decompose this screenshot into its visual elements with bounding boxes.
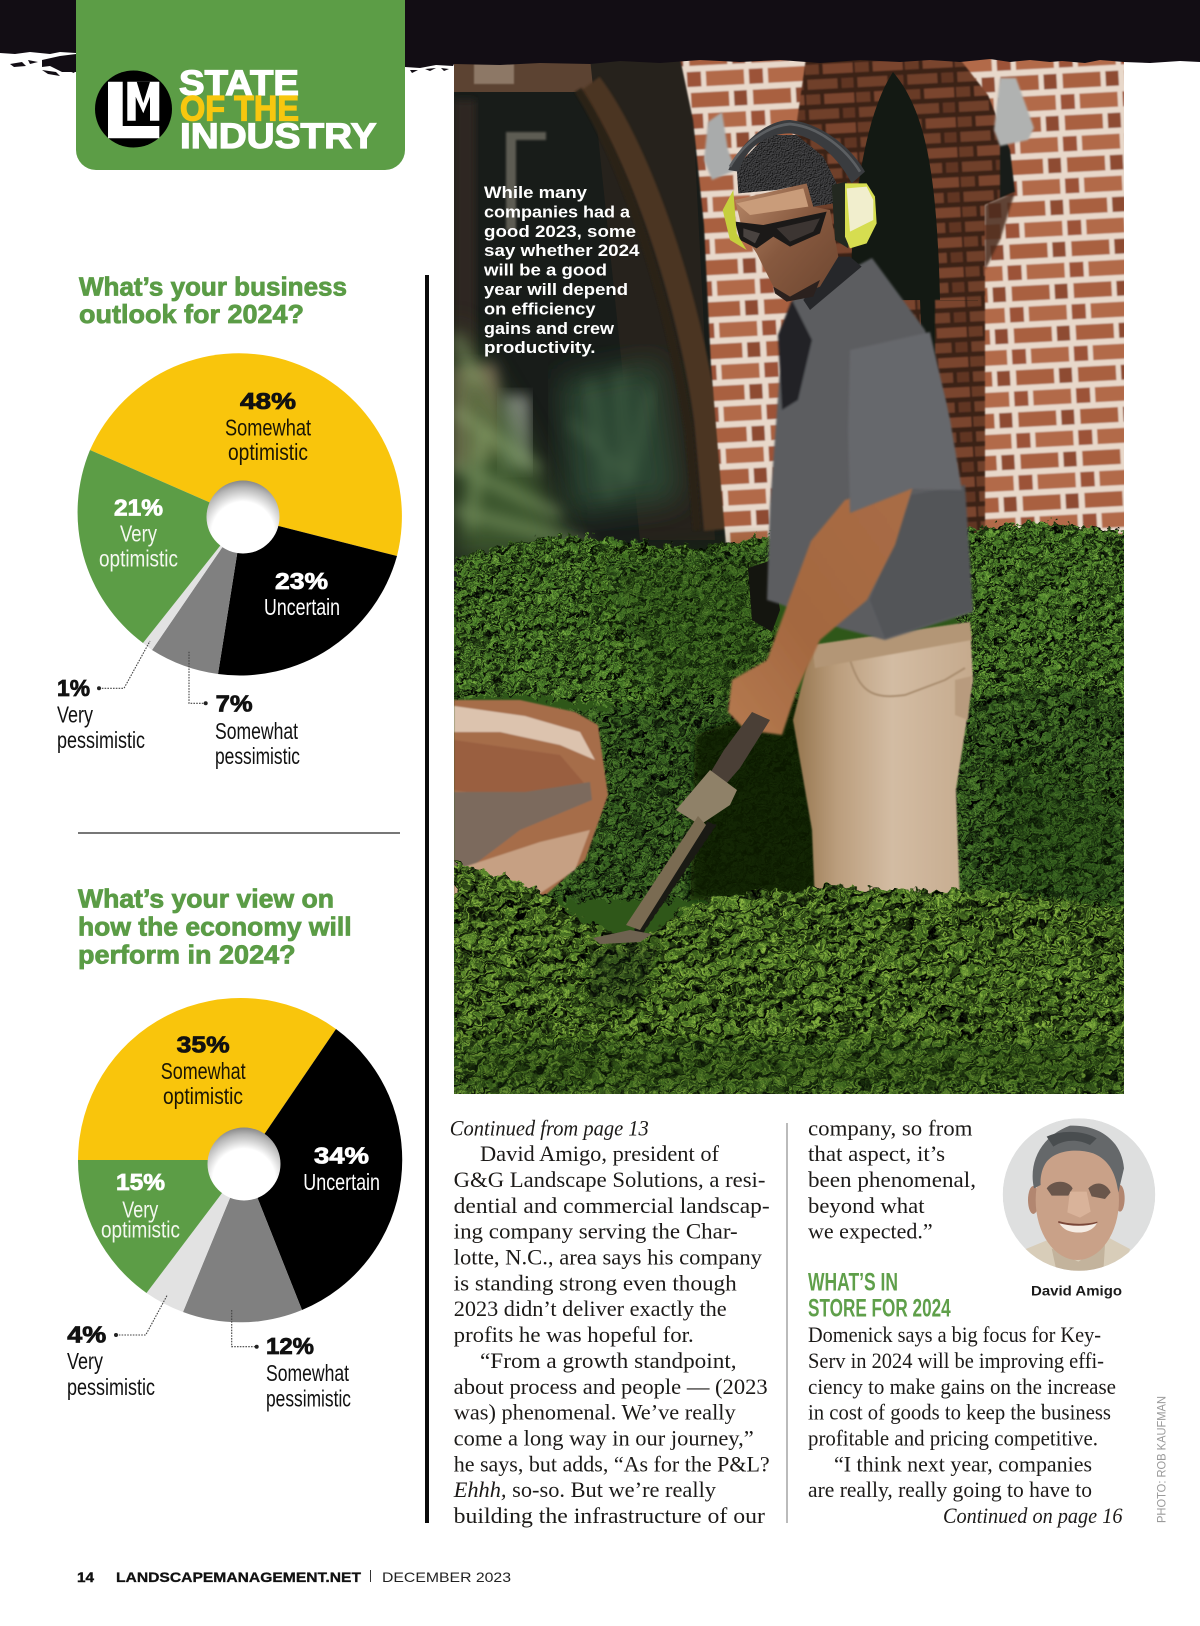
arched opening <box>852 72 978 355</box>
caption on photo: say whether 2024 <box>484 241 640 260</box>
label: 1% very pessimistic: 1% <box>57 675 90 701</box>
article column 2: company, so from <box>808 1116 973 1140</box>
man: head with ear protection <box>723 120 877 310</box>
article column 1: come a long way in our journey,” <box>454 1426 754 1450</box>
caption on photo: on efficiency <box>484 299 596 318</box>
article column 1: dential and commercial landscap- <box>454 1193 770 1218</box>
mid hedges <box>540 689 1130 925</box>
article column 2: “I think next year, companies <box>834 1451 1092 1476</box>
title text <box>179 64 376 156</box>
logo: LM roundel <box>95 70 172 148</box>
label: 48% somewhat optimistic: Somewhat <box>225 415 311 441</box>
label: 4% very pessimistic: pessimistic <box>67 1374 155 1400</box>
footer: LANDSCAPEMANAGEMENT.NET <box>116 1569 361 1585</box>
man: sleeve <box>848 332 962 513</box>
lamp left <box>704 112 736 180</box>
photo credit: PHOTO: ROB KAUFMAN <box>1156 1396 1168 1523</box>
hedge trimmer <box>593 712 770 944</box>
article column 1: Ehhh, so-so. But we’re really <box>453 1477 717 1502</box>
article column 2: Serv in 2024 will be improving effi- <box>808 1348 1104 1373</box>
photo: landscaper trimming hedge in front of brick house <box>454 58 1130 1100</box>
label: 1% very pessimistic: pessimistic <box>57 727 145 753</box>
pie chart: business outlook <box>57 353 402 769</box>
article column 1: building the infrastructure of our <box>454 1503 765 1528</box>
footer <box>77 1569 511 1585</box>
article column 2 <box>808 1116 1123 1528</box>
label: 15% very optimistic: 15% <box>116 1169 165 1195</box>
article column 1: “From a growth standpoint, <box>480 1348 737 1373</box>
label: 35% somewhat optimistic <box>161 1032 246 1109</box>
foreground hedge <box>454 862 1130 1100</box>
label: 35% somewhat optimistic: Somewhat <box>161 1058 246 1084</box>
man: trimmer harness <box>748 560 780 632</box>
caption on photo: companies had a <box>484 202 631 221</box>
caption on photo: gains and crew <box>484 319 615 338</box>
brick: right pillar <box>959 58 1130 550</box>
caption on photo: While many <box>484 183 588 202</box>
label: 7% somewhat pessimistic: 7% <box>216 691 253 717</box>
label: 21% very optimistic: optimistic <box>99 546 178 572</box>
article column 1: David Amigo, president of <box>480 1141 720 1166</box>
article column 1: profits he was hopeful for. <box>454 1322 694 1347</box>
caption on photo: good 2023, some <box>484 222 636 241</box>
label: 35% somewhat optimistic: 35% <box>177 1032 230 1058</box>
label: 48% somewhat optimistic <box>225 388 311 465</box>
label: 23% uncertain <box>264 568 340 620</box>
upper hedges <box>454 522 1130 740</box>
torn black top band <box>0 0 1200 76</box>
label: 35% somewhat optimistic: optimistic <box>163 1083 243 1109</box>
subhead: what's in store: STORE FOR 2024 <box>808 1294 951 1322</box>
article column 1 <box>450 1116 770 1528</box>
title text: STATE <box>179 64 299 103</box>
article column 2: in cost of goods to keep the business <box>808 1400 1111 1425</box>
article column 1: is standing strong even though <box>454 1270 737 1295</box>
brick: shadowed arch <box>780 58 1000 540</box>
caption on photo: will be a good <box>483 261 607 280</box>
article column 2: Continued on page 16 <box>943 1503 1123 1528</box>
label: 34% uncertain: Uncertain <box>303 1169 380 1195</box>
caption on photo: year will depend <box>484 280 628 299</box>
label: 21% very optimistic: Very <box>120 521 157 547</box>
article column 1: lotte, N.C., area says his company <box>454 1244 763 1270</box>
footer: DECEMBER 2023 <box>382 1569 511 1585</box>
caption on photo: productivity. <box>484 338 596 357</box>
label: 34% uncertain: 34% <box>314 1142 369 1168</box>
label: 21% very optimistic: 21% <box>114 495 163 521</box>
pie chart: economy view <box>67 998 402 1412</box>
article column 2: ciency to make gains on the increase <box>808 1374 1116 1399</box>
footer: 14 <box>77 1569 94 1585</box>
caption on photo <box>483 183 640 357</box>
heading: business outlook question <box>79 272 347 329</box>
label: 12% somewhat pessimistic <box>232 1310 351 1412</box>
label: 15% very optimistic: Very <box>122 1196 159 1222</box>
label: 12% somewhat pessimistic: Somewhat <box>266 1360 349 1386</box>
window interior plants and left fronds <box>454 320 680 560</box>
header tab: state of the industry <box>76 0 405 170</box>
article column 2: Domenick says a big focus for Key- <box>808 1322 1101 1347</box>
subhead: what's in store <box>808 1268 951 1322</box>
article column 2: we expected.” <box>808 1219 933 1244</box>
subhead: what's in store: WHAT’S IN <box>808 1268 898 1296</box>
article column 2: beyond what <box>808 1193 925 1218</box>
label: 15% very optimistic: optimistic <box>101 1216 180 1242</box>
article column 1: he says, but adds, “As for the P&L? <box>454 1451 770 1476</box>
label: 12% somewhat pessimistic: pessimistic <box>266 1386 351 1412</box>
title text: INDUSTRY <box>180 117 376 156</box>
article column 2: that aspect, it’s <box>808 1141 945 1166</box>
label: 48% somewhat optimistic: 48% <box>240 388 296 414</box>
man: arm and hand <box>728 480 915 735</box>
article column 2: been phenomenal, <box>808 1167 976 1192</box>
label: 34% uncertain <box>303 1142 380 1195</box>
heading: economy question: perform in 2024? <box>78 940 296 970</box>
label: 15% very optimistic <box>101 1169 180 1242</box>
man: pants <box>793 622 973 905</box>
title text: OF THE <box>180 90 299 128</box>
heading: business outlook question: What’s your business <box>79 272 347 302</box>
article column 2: are really, really going to have to <box>808 1477 1092 1502</box>
article column 1: 2023 didn’t deliver exactly the <box>454 1296 727 1321</box>
heading: business outlook question: outlook for 2024? <box>79 299 304 329</box>
article column 1: ing company serving the Char- <box>454 1219 738 1244</box>
portrait: David Amigo <box>1003 1118 1155 1275</box>
article column 1: about process and people — (2023 <box>454 1374 768 1399</box>
label: 12% somewhat pessimistic: 12% <box>266 1333 314 1359</box>
portrait caption: David Amigo <box>1031 1282 1122 1298</box>
lamp right <box>994 78 1034 146</box>
label: 7% somewhat pessimistic <box>189 652 300 769</box>
heading: economy question <box>78 884 352 970</box>
man: shirt <box>767 258 973 640</box>
article column 1: Continued from page 13 <box>450 1116 649 1140</box>
label: 4% very pessimistic: Very <box>67 1348 103 1374</box>
brick: left pillar <box>680 58 806 545</box>
label: 21% very optimistic <box>99 495 178 572</box>
label: 23% uncertain: Uncertain <box>264 594 340 620</box>
brick planter <box>454 700 608 900</box>
heading: economy question: how the economy will <box>78 912 352 942</box>
label: 7% somewhat pessimistic: Somewhat <box>215 718 298 744</box>
article column 2: profitable and pricing competitive. <box>808 1426 1098 1450</box>
label: 48% somewhat optimistic: optimistic <box>228 439 308 465</box>
article column 1: G&G Landscape Solutions, a resi- <box>454 1167 765 1192</box>
label: 23% uncertain: 23% <box>275 568 328 594</box>
label: 4% very pessimistic <box>67 1295 167 1400</box>
label: 1% very pessimistic: Very <box>57 702 93 728</box>
label: 1% very pessimistic <box>57 641 150 753</box>
label: 7% somewhat pessimistic: pessimistic <box>215 743 300 769</box>
article column 1: was) phenomenal. We’ve really <box>454 1400 736 1425</box>
heading: economy question: What’s your view on <box>78 884 334 914</box>
label: 4% very pessimistic: 4% <box>67 1322 106 1348</box>
